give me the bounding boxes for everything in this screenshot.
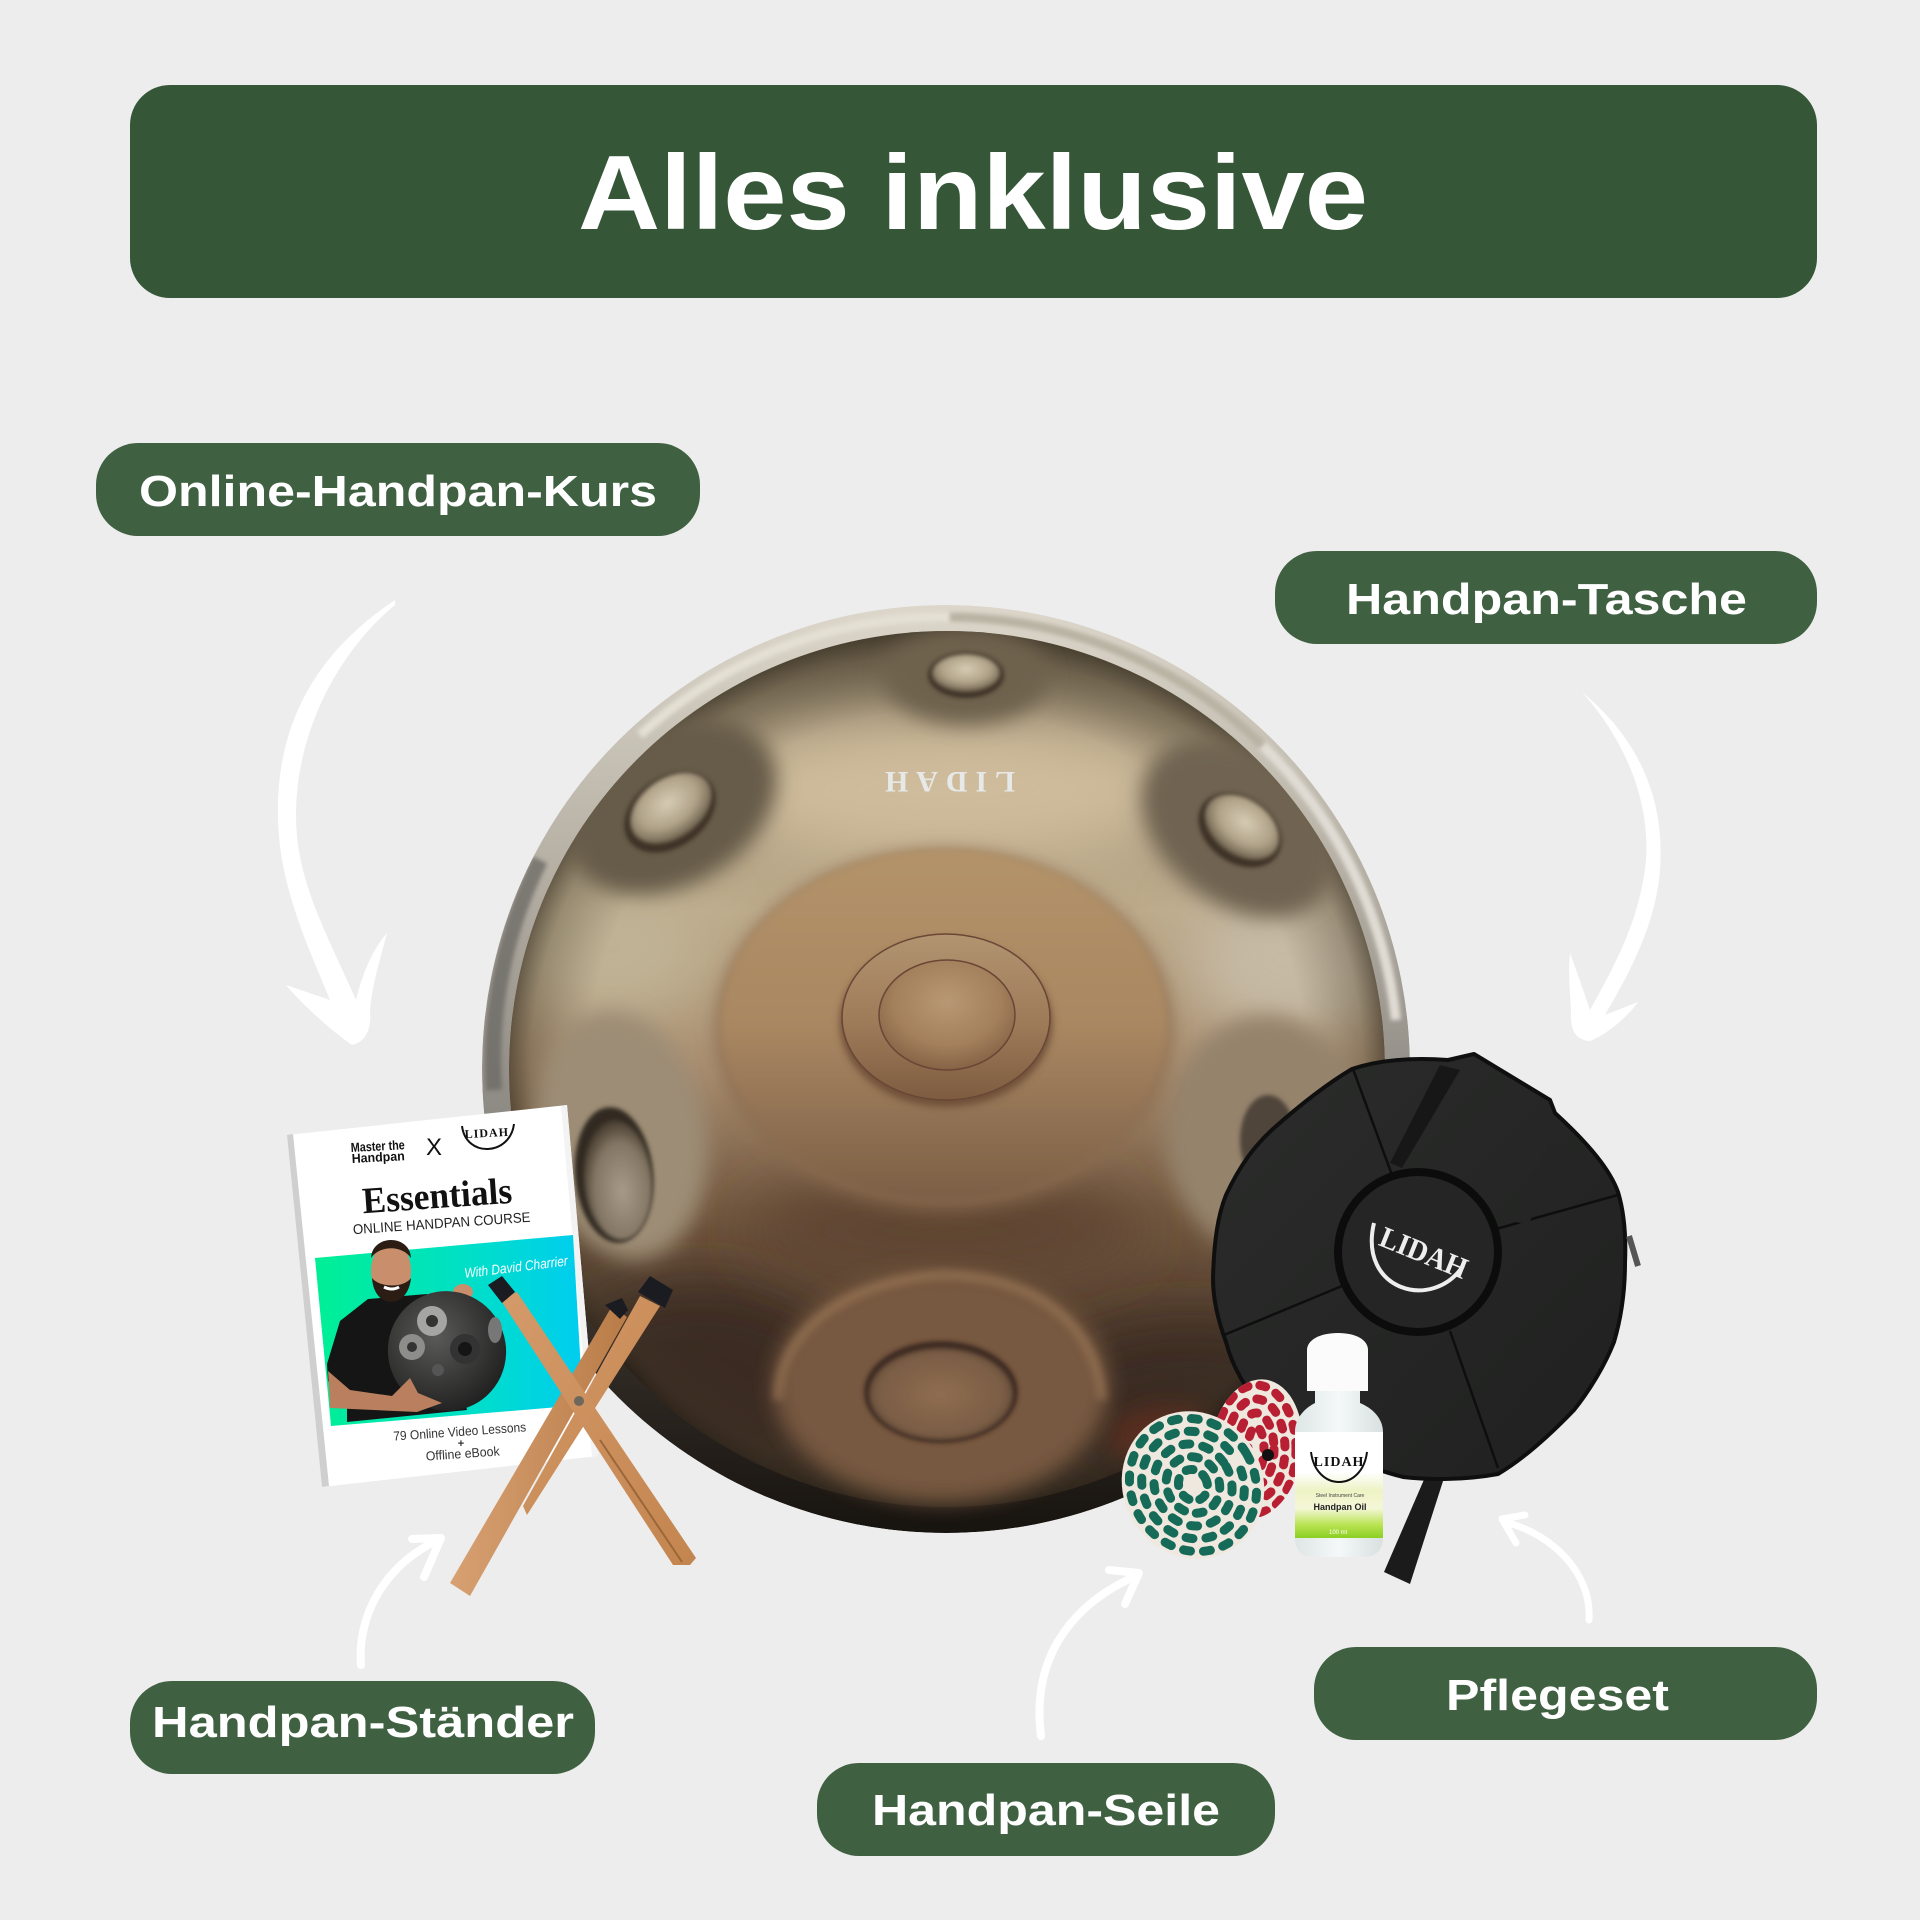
note: bottom xyxy=(773,1270,1109,1502)
book footer text: + xyxy=(458,1438,464,1450)
note: top xyxy=(883,627,1049,725)
note: upper right xyxy=(1129,738,1338,930)
bottle cap xyxy=(1307,1333,1368,1391)
engraved logo: LIDAH xyxy=(885,765,1015,798)
book logos: Master the xyxy=(350,1137,405,1155)
course book xyxy=(287,1105,598,1487)
note: upper left xyxy=(566,716,790,908)
bottle body xyxy=(1295,1391,1383,1557)
bag bottom strap xyxy=(1384,1475,1444,1584)
rope knot xyxy=(1262,1449,1274,1461)
bottle label: Handpan Oil xyxy=(1313,1502,1367,1512)
book cover image xyxy=(315,1235,583,1428)
handpan instrument xyxy=(482,605,1410,1560)
arrow: care set xyxy=(1502,1515,1589,1620)
book footer text: 79 Online Video Lessons xyxy=(393,1419,527,1444)
bottle label: LIDAH xyxy=(1314,1455,1364,1470)
stand bolt xyxy=(574,1396,584,1406)
title banner: Alles inklusive xyxy=(578,134,1368,252)
book logos: LIDAH xyxy=(464,1125,509,1141)
bottle label: Steel Instrument Care xyxy=(1316,1493,1365,1499)
stand front-left leg xyxy=(450,1306,627,1596)
bag straps xyxy=(1390,1065,1460,1168)
stand caps xyxy=(488,1276,673,1319)
book logos xyxy=(350,1124,514,1166)
bag body xyxy=(1213,1054,1625,1479)
note: left xyxy=(528,1006,715,1270)
book title: Essentials xyxy=(361,1171,513,1222)
central dome xyxy=(840,934,1052,1107)
label: Handpan-Tasche: Handpan-Tasche xyxy=(1346,575,1747,624)
stand front-right leg xyxy=(500,1292,696,1565)
book logos: X xyxy=(426,1134,442,1161)
label: Handpan-Tasche xyxy=(1275,551,1817,644)
title banner xyxy=(130,85,1817,298)
bottle label xyxy=(1295,1432,1383,1538)
arrow: stand xyxy=(361,1538,441,1665)
handpan stand xyxy=(450,1276,696,1596)
rope coils xyxy=(1122,1379,1300,1558)
bag logo: LIDAH xyxy=(1375,1221,1472,1286)
label: Handpan-Ständer xyxy=(130,1681,595,1774)
bag zipper tag xyxy=(1629,1236,1638,1266)
arrow: bag xyxy=(1569,692,1661,1041)
rope: green xyxy=(1095,1385,1291,1585)
book logos: Handpan xyxy=(351,1148,405,1166)
label: Handpan-Ständer: Handpan-Ständer xyxy=(152,1698,574,1747)
book subtitle: ONLINE HANDPAN COURSE xyxy=(352,1209,531,1237)
bag centre disc xyxy=(1334,1168,1502,1336)
man in book xyxy=(327,1240,523,1428)
handpan bag xyxy=(1213,1054,1638,1584)
book pages xyxy=(287,1105,598,1487)
label: Online-Handpan-Kurs: Online-Handpan-Kurs xyxy=(139,467,657,516)
label: Handpan-Seile xyxy=(817,1763,1275,1856)
label: Pflegeset: Pflegeset xyxy=(1446,1671,1669,1720)
bag seams xyxy=(1224,1069,1618,1468)
book footer text xyxy=(393,1419,527,1464)
rope: red xyxy=(1217,1379,1300,1518)
stand back leg xyxy=(523,1296,660,1515)
arrow: ropes xyxy=(1039,1570,1139,1736)
handpan rim xyxy=(482,605,1410,1533)
arrow: course xyxy=(278,600,395,1045)
handpan body xyxy=(509,631,1385,1507)
care oil bottle xyxy=(1295,1333,1383,1557)
label: Online-Handpan-Kurs xyxy=(96,443,700,536)
central ring xyxy=(718,849,1170,1208)
book footer text: Offline eBook xyxy=(425,1443,501,1464)
label: Handpan-Seile: Handpan-Seile xyxy=(872,1786,1220,1835)
note: right xyxy=(1166,1015,1366,1255)
label: Pflegeset xyxy=(1314,1647,1817,1740)
bottle label: 100 ml xyxy=(1329,1530,1347,1536)
book cover image: With David Charrier xyxy=(463,1252,570,1281)
